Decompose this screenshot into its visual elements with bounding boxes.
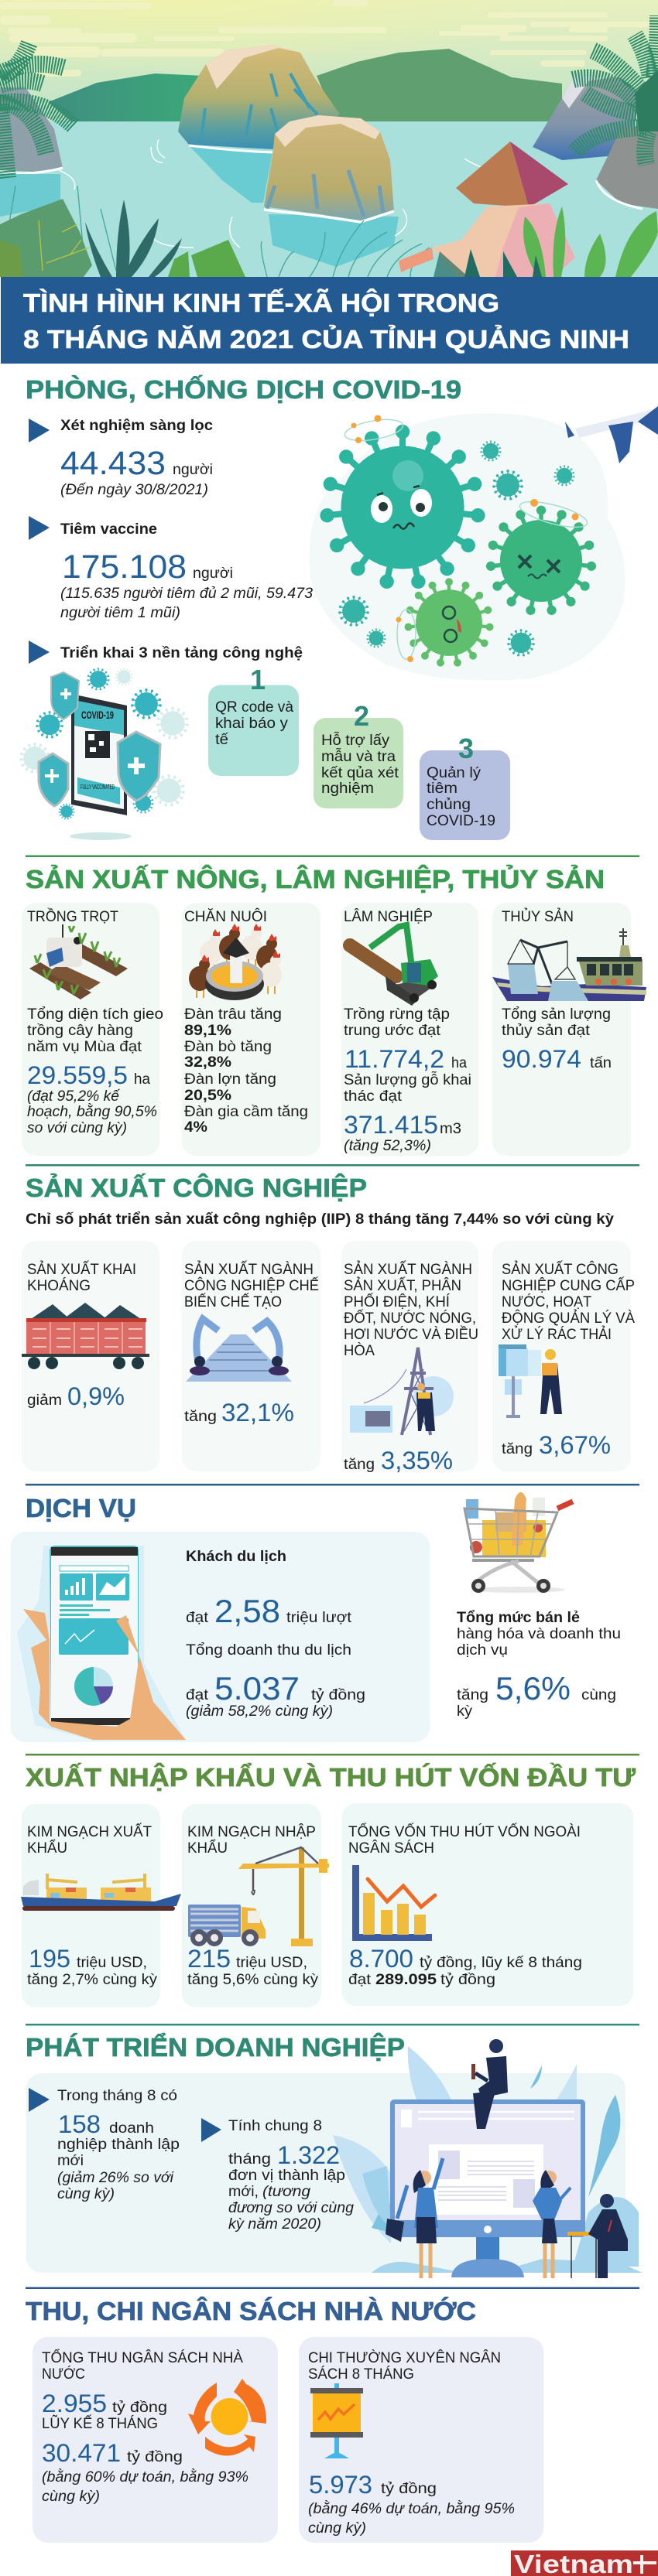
panel: tourism: (giảm 58,2% cùng kỳ) xyxy=(186,1703,333,1720)
panel: exports xyxy=(21,1804,181,2007)
icon: shopping cart xyxy=(464,1492,573,1593)
icon: electric cabinet and worker xyxy=(499,1344,562,1418)
panel: manufacturing: tăng xyxy=(184,1408,217,1425)
panel: exports: KIM NGẠCH XUẤT xyxy=(27,1823,152,1840)
item: new units over 8 months: tháng xyxy=(228,2151,271,2168)
panel: water and waste: ĐỘNG QUẢN LÝ VÀ xyxy=(502,1309,635,1327)
item: new units over 8 months: (tương xyxy=(262,2183,310,2200)
panel: water and waste: NGHIỆP CUNG CẤP xyxy=(502,1276,635,1294)
panel: livestock: 4% xyxy=(184,1119,207,1136)
panel: retail: Tổng mức bán lẻ xyxy=(457,1609,580,1626)
icon: bar and line chart xyxy=(352,1865,435,1941)
icon: phone with QR code and shields xyxy=(19,668,189,840)
item: vaccination: 175.108 xyxy=(62,548,187,586)
item: new enterprises in August: mới xyxy=(57,2152,84,2169)
heading: PHÁT TRIỂN DOANH NGHIỆP xyxy=(26,2033,405,2062)
panel: crops: TRỒNG TRỌT xyxy=(27,907,118,925)
platform card 3: 3 xyxy=(458,733,474,764)
panel: budget revenue: cùng kỳ) xyxy=(42,2488,100,2505)
item: new units over 8 months: kỳ năm 2020) xyxy=(228,2216,321,2233)
panel: budget revenue: tỷ đồng xyxy=(112,2399,167,2416)
panel: budget revenue xyxy=(33,2337,278,2543)
icon: circular arrows xyxy=(188,2379,266,2456)
panel: tourism: đạt xyxy=(186,1609,209,1626)
item: new enterprises in August: 158 xyxy=(58,2110,101,2138)
panel: crops: trồng cây hàng xyxy=(27,1022,133,1039)
panel: regular expenditure xyxy=(299,2337,543,2543)
panel: crops: năm vụ Mùa đạt xyxy=(27,1038,142,1055)
panel: power and gas: SẢN XUẤT NGÀNH xyxy=(344,1260,472,1278)
icon: excavator with logs xyxy=(350,925,438,1006)
item: new enterprises in August: Trong tháng 8 có xyxy=(57,2087,177,2104)
panel: regular expenditure: 5.973 xyxy=(309,2471,372,2499)
icon: farm robot xyxy=(29,924,128,999)
platform card 1: tế xyxy=(215,731,228,748)
panel: regular expenditure: SÁCH 8 THÁNG xyxy=(308,2365,414,2383)
panel: budget revenue: LŨY KẾ 8 THÁNG xyxy=(42,2414,158,2432)
panel: forestry: trung ước đạt xyxy=(344,1022,441,1039)
icon: chart banner xyxy=(310,2383,363,2458)
platform card 3 xyxy=(420,733,510,840)
panel: enterprises xyxy=(26,2073,625,2273)
item: new enterprises in August: (giảm 26% so với xyxy=(57,2169,174,2186)
panel: crops: ha xyxy=(134,1071,150,1088)
panel: livestock: 89,1% xyxy=(184,1022,231,1039)
platform card 1: 1 xyxy=(250,664,266,695)
panel: mining: giảm xyxy=(27,1392,62,1409)
panel: forestry: LÂM NGHIỆP xyxy=(344,907,433,925)
panel: forestry: Sản lượng gỗ khai xyxy=(344,1071,471,1088)
item: screening tests: 44.433 xyxy=(60,445,166,482)
item: vaccination: người xyxy=(193,565,233,582)
platform card 2: nghiệm xyxy=(321,780,374,797)
panel: imports: triệu USD, xyxy=(236,1954,307,1971)
panel: power and gas: HƠI NƯỚC VÀ ĐIỀU xyxy=(344,1325,478,1343)
item: screening tests: người xyxy=(173,461,213,478)
panel: mining: SẢN XUẤT KHAI xyxy=(27,1260,136,1278)
panel: crops: Tổng diện tích gieo xyxy=(27,1006,163,1023)
panel: forestry: Trồng rừng tập xyxy=(344,1006,450,1023)
platform card 2: Hỗ trợ lấy xyxy=(321,731,389,749)
panel: water and waste: tăng xyxy=(502,1440,533,1457)
platform card 3: chủng xyxy=(427,796,471,813)
panel: investment: TỔNG VỐN THU HÚT VỐN NGOÀI xyxy=(348,1822,581,1840)
icon: hand holding phone with charts xyxy=(17,1546,186,1741)
panel: budget revenue: tỷ đồng xyxy=(127,2448,183,2465)
panel: imports xyxy=(182,1804,329,2007)
item: vaccination: người tiêm 1 mũi) xyxy=(60,604,180,621)
panel: tourism: Tổng doanh thu du lịch xyxy=(186,1642,351,1659)
panel: tourism: Khách du lịch xyxy=(186,1548,286,1565)
platform card 2: kết qủa xét xyxy=(321,764,399,781)
panel: tourism: 5.037 xyxy=(214,1670,300,1707)
heading: XUẤT NHẬP KHẨU VÀ THU HÚT VỐN ĐẦU TƯ xyxy=(26,1762,636,1792)
panel: livestock: Đàn gia cầm tăng xyxy=(184,1103,308,1120)
heading: SẢN XUẤT NÔNG, LÂM NGHIỆP, THỦY SẢN xyxy=(26,864,605,893)
panel: power and gas: ĐỐT, NƯỚC NÓNG, xyxy=(344,1308,476,1327)
panel: forestry: ha xyxy=(451,1054,467,1071)
panel: fishery: THỦY SẢN xyxy=(502,907,574,925)
panel: imports: tăng 5,6% cùng kỳ xyxy=(187,1971,318,1988)
panel: regular expenditure: (bằng 46% dự toán, bằng 95% xyxy=(308,2499,515,2517)
panel: retail: hàng hóa và doanh thu xyxy=(457,1625,621,1642)
item heading: 3 technology platforms: Triển khai 3 nền tảng công nghệ xyxy=(60,644,303,661)
panel: imports: 215 xyxy=(187,1945,231,1973)
panel: budget revenue: 2.955 xyxy=(42,2390,107,2417)
icon: robot arms and conveyor xyxy=(186,1319,292,1382)
panel: investment: 8.700 xyxy=(349,1945,413,1973)
panel: regular expenditure: CHI THƯỜNG XUYÊN NGÂN xyxy=(308,2349,501,2366)
header banner xyxy=(1,277,658,364)
section: services xyxy=(11,1492,621,1742)
section: trade and investment xyxy=(21,1762,636,2007)
panel: investment: tỷ đồng, lũy kế 8 tháng xyxy=(420,1954,582,1971)
panel: mining: 0,9% xyxy=(67,1382,125,1410)
panel: crops xyxy=(22,903,163,1156)
panel: livestock: Đàn trâu tăng xyxy=(184,1006,282,1023)
icon: phone with QR code and shields: COVID-19 xyxy=(81,709,114,721)
panel: budget revenue: NƯỚC xyxy=(42,2365,85,2383)
panel: retail: kỳ xyxy=(457,1703,472,1720)
panel: power and gas: tăng xyxy=(344,1456,375,1473)
panel: power and gas: SẢN XUẤT, PHÂN xyxy=(344,1276,461,1294)
panel: water and waste: 3,67% xyxy=(539,1431,611,1459)
logo: Vietnam+ xyxy=(511,2550,658,2576)
panel: forestry: (tăng 52,3%) xyxy=(344,1137,431,1154)
panel: forestry: 11.774,2 xyxy=(344,1045,444,1073)
panel: tourism: triệu lượt xyxy=(286,1609,352,1626)
item: screening tests: Xét nghiệm sàng lọc xyxy=(60,417,213,434)
platform card 3: tiêm xyxy=(427,780,458,797)
panel: crops: so với cùng kỳ) xyxy=(27,1119,127,1136)
panel: investment: NGÂN SÁCH xyxy=(348,1839,434,1857)
illustration: people and monitor xyxy=(333,2039,643,2278)
icon: chickens around feeder xyxy=(189,924,282,1000)
item: new units over 8 months xyxy=(201,2117,354,2233)
item heading: 3 technology platforms xyxy=(29,641,303,664)
panel: mining xyxy=(22,1241,159,1471)
panel: investment xyxy=(342,1803,633,2006)
header illustration: Ha Long bay landscape xyxy=(0,0,658,277)
panel: power and gas: HÒA xyxy=(344,1341,375,1359)
panel: budget revenue: (bằng 60% dự toán, bằng 93% xyxy=(42,2468,248,2485)
panel: tourism: đạt xyxy=(186,1686,209,1703)
panel: livestock: Đàn lợn tăng xyxy=(184,1071,276,1088)
panel: manufacturing: BIẾN CHẾ TẠO xyxy=(184,1293,282,1310)
panel: crops: hoạch, bằng 90,5% xyxy=(27,1102,157,1120)
panel: fishery: thủy sản đạt xyxy=(502,1022,591,1039)
panel: water and waste xyxy=(492,1241,635,1471)
panel: manufacturing: CÔNG NGHIỆP CHẾ xyxy=(184,1276,319,1294)
main title line 2: 8 THÁNG NĂM 2021 CỦA TỈNH QUẢNG NINH xyxy=(23,325,629,354)
panel: water and waste: SẢN XUẤT CÔNG xyxy=(502,1260,619,1278)
item: new units over 8 months: mới, xyxy=(228,2183,259,2200)
panel: mining: KHOÁNG xyxy=(27,1276,91,1294)
item: new enterprises in August xyxy=(29,2087,180,2202)
item: vaccination: (115.635 người tiêm đủ 2 mũi, 59.473 xyxy=(60,585,313,602)
item: vaccination xyxy=(29,516,313,621)
platform card 2: mẫu và tra xyxy=(321,747,396,765)
platform card 2 xyxy=(314,700,403,808)
panel: forestry: m3 xyxy=(440,1120,461,1137)
icon: fishing boat xyxy=(492,928,646,1001)
icon: container ship xyxy=(21,1874,181,1911)
panel: budget revenue: 30.471 xyxy=(42,2439,121,2467)
panel: fishery: Tổng sản lượng xyxy=(502,1006,611,1023)
platform card 3: COVID-19 xyxy=(427,812,495,829)
panel: retail: dịch vụ xyxy=(457,1642,508,1659)
icon: coal wagon xyxy=(22,1303,149,1369)
panel: livestock: Đàn bò tăng xyxy=(184,1038,272,1055)
panel: exports: triệu USD, xyxy=(77,1954,147,1971)
main title line 1: TÌNH HÌNH KINH TẾ-XÃ HỘI TRONG xyxy=(23,288,499,317)
heading: SẢN XUẤT CÔNG NGHIỆP xyxy=(26,1173,367,1202)
item: new enterprises in August: cùng kỳ) xyxy=(57,2185,115,2202)
icon: crane and truck xyxy=(188,1847,329,1946)
panel: retail: 5,6% xyxy=(495,1670,571,1707)
platform card 1: khai báo y xyxy=(215,715,288,732)
panel: tourism xyxy=(11,1532,430,1742)
item: new enterprises in August: doanh xyxy=(109,2120,154,2137)
panel: imports: KIM NGẠCH NHẬP xyxy=(187,1823,316,1840)
section: COVID-19 xyxy=(19,374,658,840)
panel: power and gas: 3,35% xyxy=(381,1447,453,1474)
item: vaccination: Tiêm vaccine xyxy=(60,521,157,538)
panel: investment: đạt xyxy=(348,1971,372,1988)
panel: fishery xyxy=(492,903,646,1156)
heading: DỊCH VỤ xyxy=(26,1494,136,1522)
item: new units over 8 months: 1.322 xyxy=(277,2141,340,2169)
panel: fishery: 90.974 xyxy=(502,1045,581,1073)
panel: manufacturing: 32,1% xyxy=(221,1399,294,1426)
panel: power and gas: PHỐI ĐIỆN, KHÍ xyxy=(344,1292,451,1310)
section: business development xyxy=(26,2033,643,2278)
panel: livestock xyxy=(182,903,320,1156)
item: new units over 8 months: đơn vị thành lập xyxy=(228,2167,345,2184)
panel: imports: KHẨU xyxy=(187,1839,228,1857)
panel: regular expenditure: cùng kỳ) xyxy=(308,2520,366,2537)
panel: manufacturing xyxy=(182,1241,320,1471)
virus cloud illustration xyxy=(310,406,658,681)
panel: exports: tăng 2,7% cùng kỳ xyxy=(27,1971,157,1988)
section: industrial production xyxy=(22,1173,635,1474)
item: new units over 8 months: đương so với cùng xyxy=(228,2199,354,2216)
panel: exports: KHẨU xyxy=(27,1839,67,1857)
panel: manufacturing: SẢN XUẤT NGÀNH xyxy=(184,1260,314,1278)
panel: water and waste: NƯỚC, HOẠT xyxy=(502,1293,591,1310)
item: new units over 8 months: Tính chung 8 xyxy=(228,2117,322,2134)
platform card 3: Quản lý xyxy=(427,764,481,781)
platform card 1 xyxy=(208,664,299,776)
panel: power and gas xyxy=(341,1241,478,1474)
panel: budget revenue: TỔNG THU NGÂN SÁCH NHÀ xyxy=(42,2348,243,2366)
item: screening tests: (Đến ngày 30/8/2021) xyxy=(60,481,208,498)
panel: tourism: tỷ đồng xyxy=(311,1686,365,1703)
panel: livestock: CHĂN NUÔI xyxy=(184,907,267,925)
panel: fishery: tấn xyxy=(590,1054,612,1071)
panel: forestry: thác đạt xyxy=(344,1088,403,1105)
panel: livestock: 32,8% xyxy=(184,1054,231,1071)
heading: THU, CHI NGÂN SÁCH NHÀ NƯỚC xyxy=(26,2297,476,2325)
panel: exports: 195 xyxy=(29,1945,70,1973)
panel: investment: 289.095 xyxy=(375,1971,437,1988)
panel: retail: cùng xyxy=(581,1686,616,1703)
panel: crops: (đạt 95,2% kế xyxy=(27,1088,120,1105)
panel: forestry xyxy=(341,903,478,1156)
subheading: IIP index: Chỉ số phát triển sản xuất công nghiệp (IIP) 8 tháng tăng 7,44% so với cùng kỳ xyxy=(26,1211,614,1228)
panel: livestock: 20,5% xyxy=(184,1087,231,1104)
icon: phone with QR code and shields: FULLY VACCINATED xyxy=(81,784,115,791)
section: agriculture, forestry, fishery xyxy=(22,864,646,1156)
panel: regular expenditure: tỷ đồng xyxy=(381,2480,437,2497)
icon: pylon, transformer and worker xyxy=(350,1348,454,1435)
heading: PHÒNG, CHỐNG DỊCH COVID-19 xyxy=(26,374,461,404)
panel: tourism: 2,58 xyxy=(214,1593,280,1629)
item: screening tests xyxy=(29,417,213,498)
item: new enterprises in August: nghiệp thành lập xyxy=(57,2136,180,2153)
panel: forestry: 371.415 xyxy=(344,1111,438,1139)
panel: crops: 29.559,5 xyxy=(27,1061,128,1089)
panel: water and waste: XỬ LÝ RÁC THẢI xyxy=(502,1324,612,1343)
section: state budget xyxy=(26,2297,543,2543)
panel: retail xyxy=(457,1492,621,1720)
panel: retail: tăng xyxy=(457,1686,488,1703)
panel: investment: tỷ đồng xyxy=(440,1971,495,1988)
platform card 1: QR code và xyxy=(215,699,293,716)
platform card 2: 2 xyxy=(354,700,369,732)
